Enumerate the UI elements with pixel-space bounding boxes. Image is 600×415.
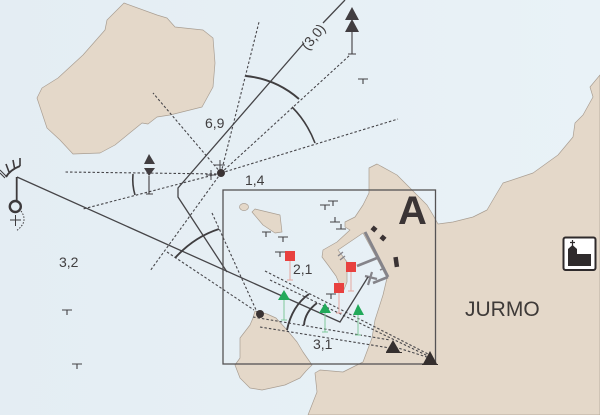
crosses near beacon (206, 160, 225, 180)
icon: church (564, 238, 596, 270)
lighthouse sector symbol (0, 158, 24, 231)
depth 2,1: 2,1 (293, 261, 313, 277)
depth (3,0) on line: (3,0) (298, 21, 329, 53)
depth 3,2: 3,2 (59, 254, 79, 270)
top double beacon (345, 7, 359, 54)
harbour buildings (370, 225, 399, 267)
depth 3,1: 3,1 (313, 336, 333, 352)
southwest island (235, 311, 312, 390)
islet (240, 204, 248, 210)
place name Jurmo: JURMO (465, 298, 540, 321)
letter A: A (398, 189, 427, 233)
green markers (278, 290, 364, 335)
Jurmo main land (308, 75, 600, 415)
inset frame A (223, 190, 436, 364)
west beacon (144, 154, 155, 194)
depth 1,4: 1,4 (245, 172, 265, 188)
dotted leading lines (65, 22, 430, 358)
small rock markers (62, 79, 368, 369)
red markers (285, 251, 356, 313)
black triangle landmarks (386, 340, 438, 364)
solid leading lines (17, 0, 368, 322)
position dots (217, 169, 264, 318)
small island (252, 209, 282, 233)
harbour piers (338, 232, 388, 285)
north island (37, 3, 215, 154)
sector arcs (133, 76, 317, 330)
depth 6,9: 6,9 (205, 115, 225, 131)
